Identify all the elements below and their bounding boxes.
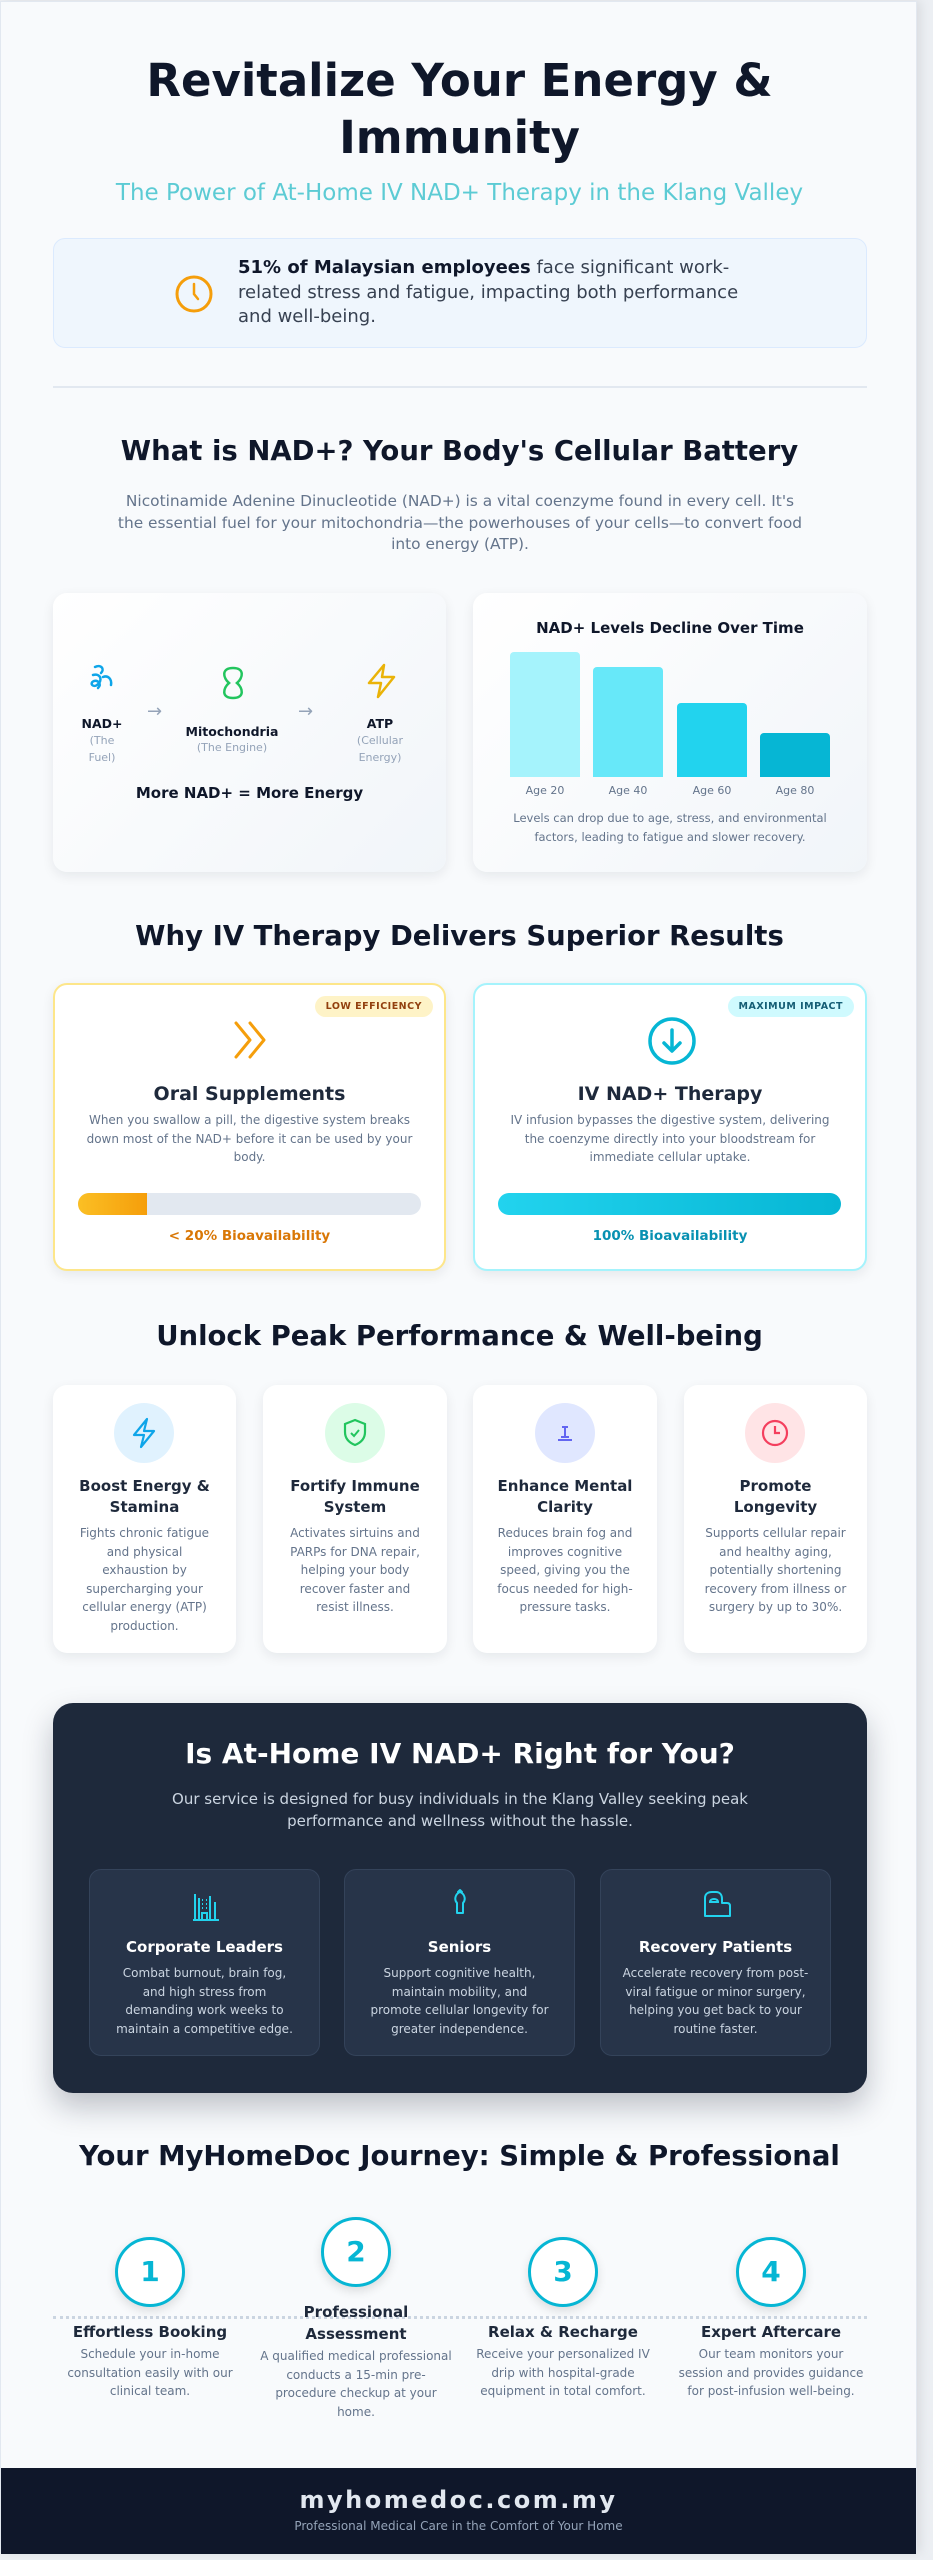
title: Effortless Booking bbox=[73, 2323, 227, 2341]
badge bbox=[315, 996, 433, 1017]
badge bbox=[728, 996, 854, 1017]
icon: bed bbox=[704, 1891, 731, 1917]
benefit: clarity bbox=[473, 1385, 657, 1653]
heading: journey: Your MyHomeDoc Journey: Simple & Professional bbox=[79, 2140, 840, 2172]
title bbox=[734, 1477, 817, 1516]
text: Activates sirtuins and PARPs for DNA repair, helping your body recover faster and resist illness. bbox=[290, 1526, 420, 1614]
panel: NAD+ decline chart bbox=[473, 593, 867, 872]
icon: person bbox=[454, 1889, 466, 1914]
heading: Is At-Home IV NAD+ Right for You? bbox=[185, 1737, 735, 1770]
label: NAD+: NAD+ bbox=[82, 716, 122, 731]
caption: More NAD+ = More Energy bbox=[136, 784, 363, 802]
text: Fights chronic fatigue and physical exhaustion by supercharging your cellular energy (ATP) production. bbox=[80, 1526, 209, 1632]
icon: clock bbox=[176, 276, 212, 312]
panel: NAD+ flow: (Cellular bbox=[357, 734, 403, 747]
heading: what is NAD+: What is NAD+? Your Body's Cellular Battery bbox=[121, 435, 798, 467]
title bbox=[304, 2303, 408, 2343]
title bbox=[79, 1477, 210, 1516]
badge: MAXIMUM IMPACT bbox=[739, 1001, 843, 1012]
bioavailability bar bbox=[78, 1193, 421, 1215]
arrow: → bbox=[298, 701, 313, 722]
card: corporate bbox=[89, 1869, 320, 2056]
label: ATP: ATP bbox=[367, 716, 393, 731]
icon: building bbox=[193, 1894, 219, 1921]
title: Longevity bbox=[734, 1498, 817, 1516]
icon: bolt bbox=[114, 1403, 174, 1463]
title: Oral Supplements bbox=[154, 1083, 345, 1105]
circle 3 bbox=[528, 2237, 598, 2307]
description: When you swallow a pill, the digestive system breaks down most of the NAD+ before it can be used by your body. bbox=[87, 1113, 412, 1164]
step 3 bbox=[476, 2237, 650, 2398]
label: 100% Bioavailability bbox=[593, 1228, 747, 1244]
card: seniors bbox=[344, 1869, 575, 2056]
title bbox=[290, 1477, 420, 1516]
panel: NAD+ flow: (The bbox=[90, 734, 114, 747]
circle 3: 3 bbox=[553, 2255, 573, 2288]
label: mitochondria: Mitochondria bbox=[186, 724, 278, 739]
text: Accelerate recovery from post-viral fatigue or minor surgery, helping you get back to your routine faster. bbox=[623, 1966, 808, 2036]
title: Clarity bbox=[537, 1498, 593, 1516]
text: Our team monitors your session and provides guidance for post-infusion well-being. bbox=[679, 2347, 863, 2398]
text: Supports cellular repair and healthy aging, potentially shortening recovery from illness or surgery by up to 30%. bbox=[705, 1526, 846, 1614]
description: IV infusion bypasses the digestive system, delivering the coenzyme directly into your bloodstream for immediate cellular uptake. bbox=[510, 1113, 830, 1164]
title: System bbox=[324, 1498, 386, 1516]
title: Relax & Recharge bbox=[488, 2323, 638, 2341]
title: Promote bbox=[740, 1477, 811, 1495]
footer bbox=[1, 2468, 916, 2554]
panel: audience bbox=[53, 1703, 867, 2093]
panel: IV NAD+ therapy bbox=[473, 983, 867, 1271]
icon: shield bbox=[325, 1403, 385, 1463]
arrow: → bbox=[147, 701, 162, 722]
title: Corporate Leaders bbox=[126, 1938, 283, 1956]
panel: NAD+ flow: (The Engine) bbox=[197, 741, 267, 754]
bar chart: Age 60 bbox=[693, 784, 731, 797]
subtitle: Our service is designed for busy individuals in the Klang Valley seeking peak performance and wellness without the hassle. bbox=[172, 1790, 748, 1830]
icon: chevrons bbox=[234, 1021, 266, 1059]
icon: NAD+ bbox=[90, 664, 112, 690]
footer brand: myhomedoc.com.my bbox=[299, 2486, 618, 2514]
title: Boost Energy & bbox=[79, 1477, 210, 1495]
title: Recovery Patients bbox=[639, 1938, 792, 1956]
title: Expert Aftercare bbox=[701, 2323, 841, 2341]
heading: unlock: Unlock Peak Performance & Well-being bbox=[156, 1320, 763, 1352]
chart title: NAD+ Levels Decline Over Time bbox=[536, 619, 804, 637]
footer tagline: Professional Medical Care in the Comfort of Your Home bbox=[294, 2519, 623, 2533]
panel: NAD+ flow bbox=[53, 593, 446, 872]
title: Enhance Mental bbox=[498, 1477, 632, 1495]
circle 2 bbox=[321, 2217, 391, 2287]
icon: ATP bolt bbox=[368, 664, 396, 698]
title: Seniors bbox=[428, 1938, 491, 1956]
bar chart: Age 80 bbox=[776, 784, 814, 797]
icon: clock bbox=[745, 1403, 805, 1463]
subtitle: The Power of At-Home IV NAD+ Therapy in the Klang Valley bbox=[116, 180, 803, 206]
title bbox=[498, 1477, 632, 1516]
text: Reduces brain fog and improves cognitive speed, giving you the focus needed for high-pressure tasks. bbox=[497, 1526, 633, 1614]
text: Schedule your in-home consultation easily with our clinical team. bbox=[67, 2347, 233, 2398]
circle 1: 1 bbox=[140, 2255, 160, 2288]
title: Professional bbox=[304, 2303, 408, 2321]
card: recovery bbox=[600, 1869, 831, 2056]
step 2 bbox=[260, 2217, 452, 2418]
bioavailability bar bbox=[498, 1193, 841, 1215]
panel: oral supplements bbox=[53, 983, 446, 1271]
icon: microscope bbox=[535, 1403, 595, 1463]
title: Fortify Immune bbox=[290, 1477, 420, 1495]
badge: LOW EFFICIENCY bbox=[326, 1001, 422, 1012]
circle 4: 4 bbox=[761, 2255, 781, 2288]
circle 2: 2 bbox=[346, 2235, 366, 2268]
step 1 bbox=[67, 2237, 233, 2398]
circle 4 bbox=[736, 2237, 806, 2307]
title: Assessment bbox=[305, 2325, 407, 2343]
title: Immunity bbox=[339, 111, 580, 164]
text: Combat burnout, brain fog, and high stress from demanding work weeks to maintain a competitive edge. bbox=[116, 1966, 293, 2036]
title: Revitalize Your Energy & bbox=[146, 54, 773, 107]
title: IV NAD+ Therapy bbox=[578, 1083, 762, 1105]
heading: why IV: Why IV Therapy Delivers Superior Results bbox=[135, 920, 784, 952]
bar chart: Age 40 bbox=[609, 784, 647, 797]
benefit: longevity bbox=[684, 1385, 867, 1653]
stat callout bbox=[53, 238, 867, 348]
benefit: immune bbox=[263, 1385, 447, 1653]
text: A qualified medical professional conducts a 15-min pre-procedure checkup at your home. bbox=[260, 2349, 452, 2418]
intro paragraph: Nicotinamide Adenine Dinucleotide (NAD+) is a vital coenzyme found in every cell. It's the essential fuel for your mitochondria—the powerhouses of your cells—to convert food into energy (ATP). bbox=[118, 492, 802, 553]
panel: NAD+ flow: Fuel) bbox=[89, 750, 115, 764]
circle 1 bbox=[115, 2237, 185, 2307]
chart caption: Levels can drop due to age, stress, and environmental factors, leading to fatigue and slower recovery. bbox=[513, 811, 827, 844]
stat text: 51% of Malaysian employees face significant work-related stress and fatigue, impacting both performance and well-being. bbox=[238, 257, 738, 327]
bar chart: Age 20 bbox=[526, 784, 564, 797]
text: Receive your personalized IV drip with hospital-grade equipment in total comfort. bbox=[476, 2347, 650, 2398]
benefit: energy bbox=[53, 1385, 236, 1653]
icon: arrow down circle bbox=[648, 1017, 696, 1065]
step 4 bbox=[679, 2237, 863, 2398]
title bbox=[146, 54, 773, 164]
label: < 20% Bioavailability bbox=[169, 1228, 330, 1244]
panel: NAD+ flow: Energy) bbox=[359, 750, 401, 764]
bar chart bbox=[510, 652, 830, 797]
icon: mitochondria bbox=[223, 666, 243, 700]
text: Support cognitive health, maintain mobility, and promote cellular longevity for greater independence. bbox=[370, 1966, 549, 2036]
title: Stamina bbox=[110, 1498, 179, 1516]
